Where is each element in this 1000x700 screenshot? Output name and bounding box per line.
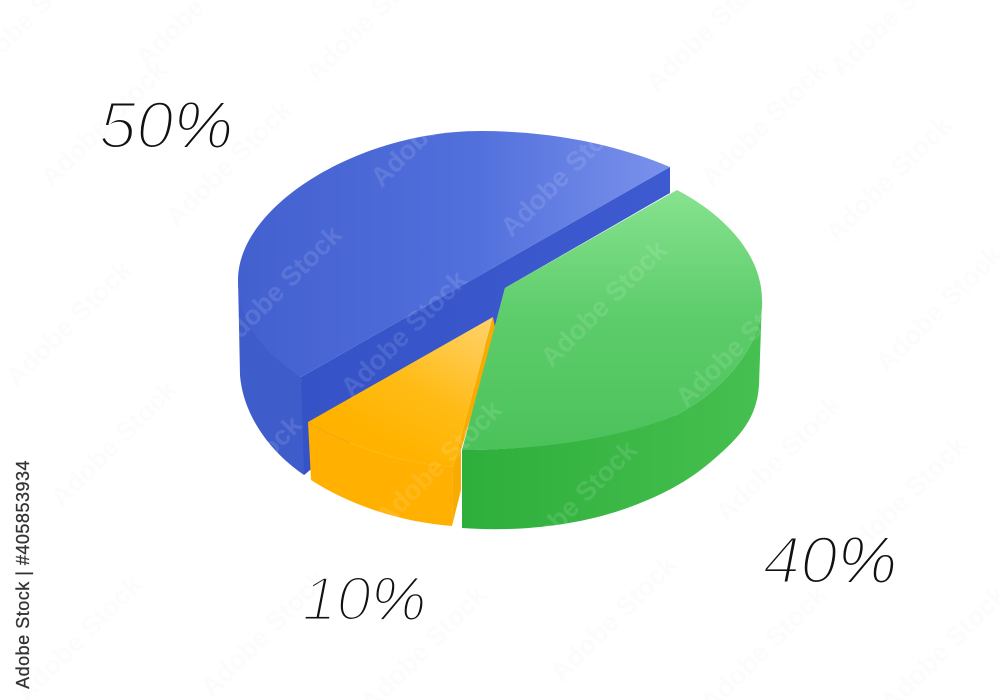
watermarks: Adobe Stock [0,254,138,393]
label: 40%: 40% [763,523,897,598]
watermarks: Adobe Stock [820,109,958,248]
blue top face [238,131,670,377]
slice: green 40% [462,190,762,529]
green outer side [462,300,762,529]
watermarks: Adobe Stock [210,219,348,358]
watermarks: Adobe Stock [535,234,673,373]
watermarks: Adobe Stock [170,409,308,548]
watermarks: Adobe Stock [505,434,643,573]
watermarks: Adobe Stock [835,429,973,568]
watermarks: Adobe Stock [495,104,633,243]
label: 50%: 50% [99,88,233,163]
watermarks: Adobe Stock [545,549,683,688]
watermarks: Adobe Stock [710,389,848,528]
green top face [462,190,762,450]
watermarks: Adobe Stock [370,394,508,533]
watermarks: Adobe Stock [335,264,473,403]
watermarks: Adobe Stock [695,54,833,193]
yellow top face [308,317,493,467]
yellow outer side [308,422,453,526]
stock id: Adobe Stock | #405853934 [13,460,33,689]
blue outer side [238,278,310,475]
watermarks: Adobe Stock [195,564,333,700]
slice: blue 50% [238,131,670,475]
watermarks: Adobe Stock [670,274,808,413]
yellow cut face [452,317,496,526]
label: 10%: 10% [302,565,426,634]
watermarks: Adobe Stock [365,54,503,193]
slice: yellow 10% [308,317,496,526]
pie chart [238,131,762,529]
watermarks: Adobe Stock [160,94,298,233]
blue inner wall [301,167,670,475]
watermarks: Adobe Stock [35,54,173,193]
watermarks: Adobe Stock [45,374,183,513]
